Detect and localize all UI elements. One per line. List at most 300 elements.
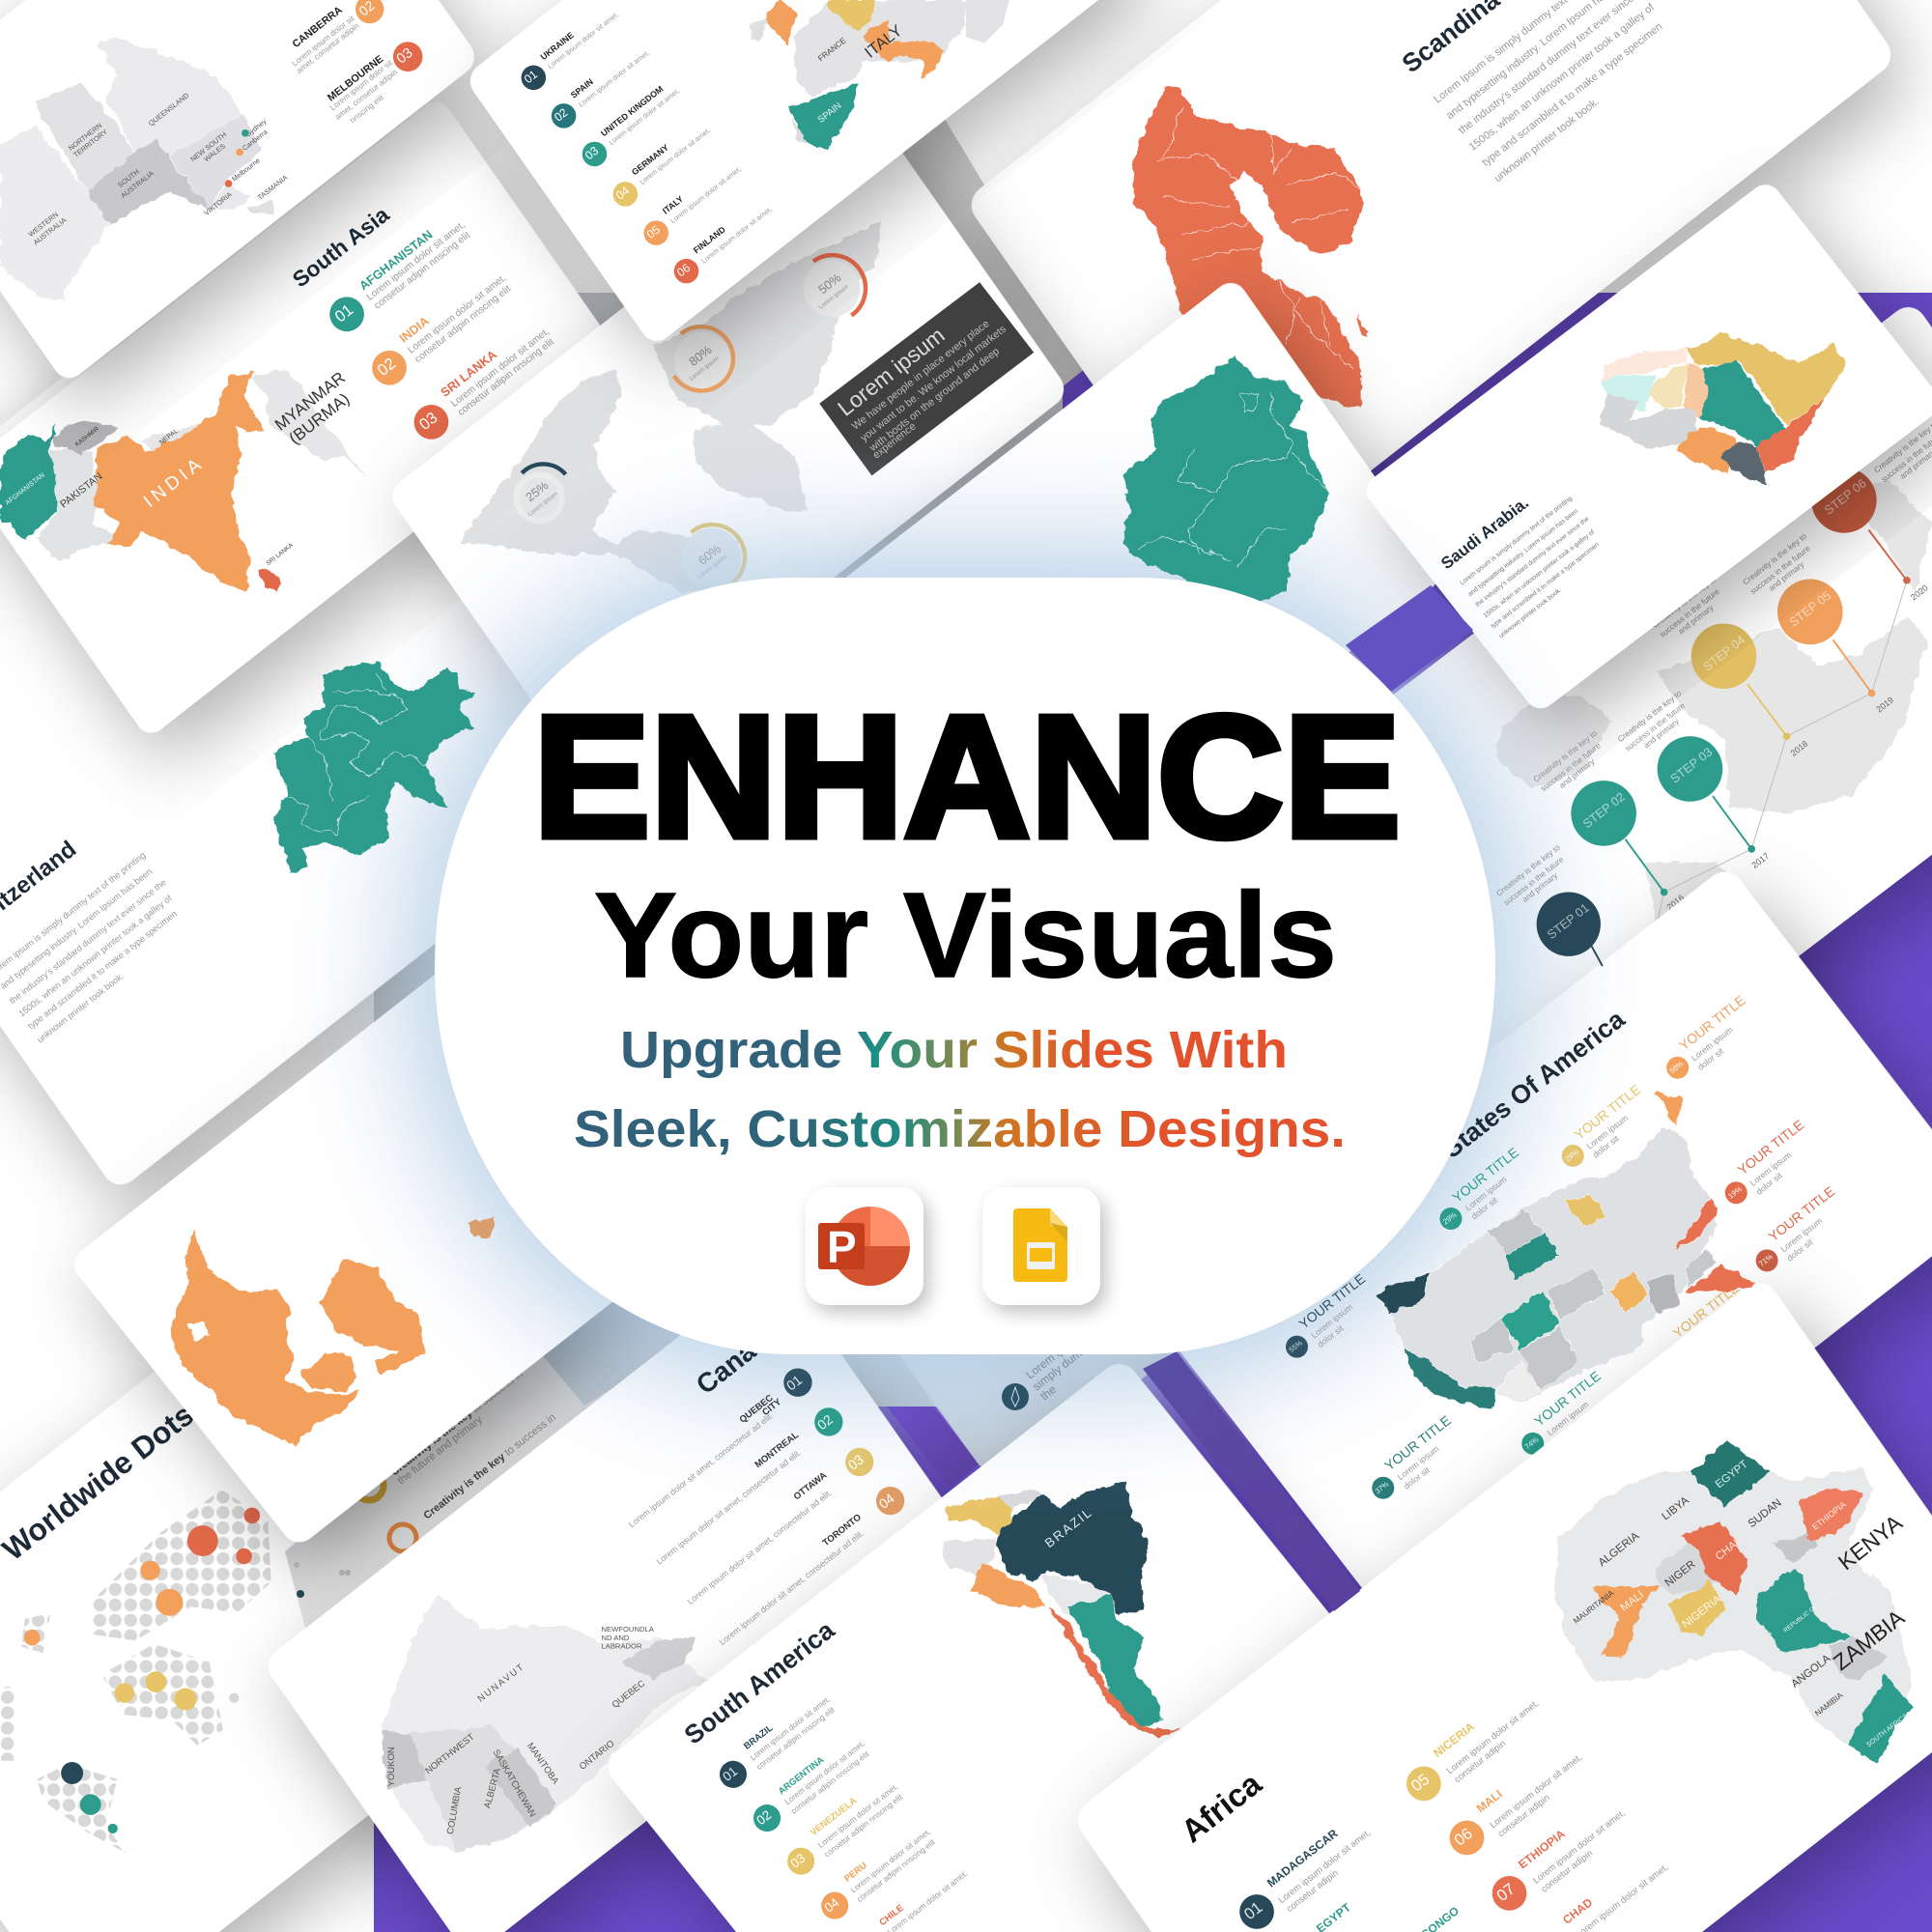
Canada heading and list: OTTAWA: [792, 1470, 829, 1502]
Saudi Arabia body text: type and scrambled it to make a type specimen: [1490, 541, 1601, 630]
Africa list: ETHIOPIA: [1516, 1827, 1568, 1871]
Europe list: [522, 10, 774, 283]
Scandinavia body text: unknown printer took book.: [1492, 96, 1602, 185]
steps years and notes: success in the future: [1623, 700, 1687, 753]
Saudi Arabia body text: the industry's standard dummy text ever since the: [1474, 516, 1591, 609]
Africa map: MALI: [1619, 1589, 1646, 1614]
Australia map: NORTHERN: [67, 121, 103, 153]
dark callout box: Lorem ipsum: [833, 323, 950, 421]
Canada heading and list: 01: [783, 1372, 805, 1393]
Canada map: LABRADOR: [601, 1642, 642, 1651]
Scandinavia body text: type and scrambled it to make a type specimen: [1480, 21, 1664, 169]
Africa list: CHAD: [1560, 1895, 1595, 1927]
Canada map: COLUMBIA: [445, 1785, 465, 1835]
USA callouts: dolor sit: [1754, 1170, 1784, 1197]
USA callouts: Lorem ipsum: [1585, 1113, 1630, 1151]
steps pins: STEP 03: [1667, 745, 1715, 786]
steps years and notes: 2019: [1874, 695, 1895, 715]
Africa list: 05: [1407, 1770, 1433, 1795]
Switzerland text: type and scrambled it to make a type specimen: [26, 909, 179, 1031]
Africa map: [1554, 1440, 1912, 1764]
South America list: 02: [753, 1807, 774, 1828]
Canada heading and list: CITY: [760, 1397, 784, 1418]
Europe list: 03: [582, 144, 601, 162]
steps years and notes: success in the future: [1658, 586, 1721, 639]
Africa map: ANGOLA: [1789, 1653, 1833, 1690]
USA callouts: [1372, 992, 1837, 1499]
Canada map: NEWFOUNDLA: [601, 1625, 655, 1634]
Canada heading and list: Lorem ipsum dolor sit amet, consectetur ad elit.: [685, 1488, 834, 1606]
steps years and notes: success in the future: [1748, 543, 1812, 596]
dark callout box: experience: [870, 420, 919, 462]
steps years and notes: [1615, 418, 1932, 912]
Africa map: ETHIOPIA: [1810, 1499, 1848, 1532]
Australia list: MELBOURNE: [326, 53, 385, 104]
Australia map: Canberra: [241, 127, 270, 153]
Europe list: 02: [552, 105, 571, 125]
Australia map: [0, 37, 290, 302]
Canada heading and list: QUEBEC: [738, 1393, 776, 1426]
USA callouts: dolor sit: [1785, 1236, 1815, 1264]
Australia list: amet, consetur adipin: [333, 67, 399, 122]
rocket list item: [1002, 1330, 1096, 1410]
panel: Denmark slide: [68, 875, 791, 1549]
Australia map: WALES: [202, 142, 227, 163]
South Asia list: Lorem ipsum dolor sit amet,: [406, 272, 508, 355]
South America list: Lorem ipsum dolor sit amet,: [748, 1694, 832, 1762]
USA callouts: Lorem ipsum: [1690, 1025, 1735, 1063]
panel: USA slide: [1151, 865, 1932, 1659]
Africa list: NICERIA: [1431, 1719, 1477, 1760]
South America map: BRAZIL: [1042, 1504, 1095, 1550]
percentage ring 80: Lorem ipsum: [689, 355, 721, 383]
map: teal country: [1123, 356, 1329, 601]
USA callouts: Lorem ipsum: [1546, 1400, 1590, 1437]
USA callouts: 37%: [1374, 1480, 1390, 1495]
Australia map: AUSTRALIA: [32, 215, 68, 246]
USA heading and callouts nearest the badge: dolor sit: [1469, 1195, 1499, 1221]
USA heading and callouts nearest the badge: Lorem ipsum: [1463, 1175, 1509, 1212]
South America list: BRAZIL: [742, 1722, 776, 1752]
South America list: VENEZUELA: [809, 1796, 859, 1838]
USA callouts: YOUR TITLE: [1381, 1412, 1454, 1473]
South Asia map: AFGHANISTAN: [5, 472, 46, 507]
South Asia map: MYANMAR: [270, 367, 349, 435]
steps 01 and 02 nearest the badge: [1494, 728, 1667, 966]
Africa map: LIBYA: [1660, 1494, 1691, 1522]
Canada heading and list: Lorem ipsum dolor sit amet, consectetur ad elit.: [655, 1447, 803, 1567]
USA callouts: dolor sit: [1402, 1464, 1432, 1492]
percentage ring 25: Lorem ipsum: [526, 491, 559, 518]
Scandinavia map: [1132, 86, 1368, 408]
steps map: [1496, 480, 1932, 936]
Australia map: QUEENSLAND: [147, 91, 190, 128]
steps pins: STEP 06: [1822, 475, 1869, 518]
map: USA: [1376, 1093, 1758, 1409]
Europe map: SPAIN: [816, 100, 843, 126]
South Asia list: 02: [374, 355, 399, 380]
steps 01 and 02 nearest the badge: Creativity is the key to: [1494, 842, 1562, 898]
steps pins: STEP 04: [1700, 632, 1747, 674]
South America map: [941, 1481, 1179, 1739]
South America list: consetur adipin nnscing elit: [855, 1836, 937, 1904]
Australia list: 03: [394, 45, 416, 67]
Canada heading and list: Lorem ipsum dolor sit amet, consectetur ad elit.: [627, 1410, 775, 1529]
panel: Saudi Arabia slide: [1360, 179, 1932, 715]
South America heading: South America: [679, 1615, 840, 1750]
Europe list: 06: [674, 261, 693, 279]
South Asia list: Lorem ipsum dolor sit amet,: [449, 327, 552, 410]
Canada map: ALBERTA: [482, 1767, 503, 1809]
percentage ring 60: Lorem ipsum: [696, 554, 728, 581]
Europe list: SPAIN: [569, 76, 595, 100]
Europe list: UKRAINE: [539, 30, 576, 62]
Africa list: consetur adipin: [1285, 1867, 1341, 1915]
Canada map: ONTARIO: [578, 1739, 616, 1773]
Africa heading: Africa: [1175, 1766, 1268, 1850]
Canada map: [381, 1595, 708, 1853]
panel: South Asia slide: [0, 96, 628, 739]
Canada heading and list: TORONTO: [821, 1512, 864, 1548]
Canada map: SASKATCHEWAN: [491, 1747, 538, 1819]
Scandinavia body text: [1432, 0, 1664, 185]
Australia list: nnscing elit: [348, 92, 385, 125]
steps 01 and 02 nearest the badge: STEP 02: [1580, 789, 1628, 831]
USA callouts: YOUR TITLE: [1572, 1082, 1643, 1143]
South Asia map: KASHMIR: [74, 425, 100, 448]
Switzerland text: and typesetting industry. Lorem Ipsum has been: [0, 867, 154, 991]
South America list: 01: [720, 1764, 740, 1784]
steps 01 and 02 nearest the badge: Creativity is the key to: [1531, 728, 1599, 784]
Europe map: ITALY: [861, 21, 905, 62]
Europe list: UNITED KINGDOM: [599, 84, 665, 138]
Africa map: ZAMBIA: [1829, 1605, 1910, 1675]
USA heading and callouts nearest the badge: 29%: [1441, 1210, 1459, 1226]
heading: Your Visuals: Your Visuals: [594, 868, 1337, 1003]
Saudi Arabia body text: 1500s, when an unknown printer took a galley of: [1483, 528, 1596, 619]
Australia map: SOUTH: [116, 167, 141, 189]
South Asia heading: South Asia: [288, 202, 394, 292]
Canada heading and list: 03: [845, 1451, 867, 1473]
panel: Europe slide: [464, 0, 1141, 348]
Africa map: CHAD: [1714, 1534, 1746, 1563]
Saudi Arabia body text: Lorem ipsum is simply dummy text of the printing: [1459, 496, 1574, 586]
Europe list: ITALY: [661, 194, 685, 216]
USA heading and callouts nearest the badge: 55%: [1287, 1338, 1304, 1354]
USA heading and callouts nearest the badge: YOUR TITLE: [1296, 1270, 1368, 1332]
band: timeline slide peeking out: [285, 1246, 734, 1642]
USA callouts: 29%: [1563, 1148, 1580, 1163]
Europe list: GERMANY: [630, 142, 670, 177]
USA callouts: 58%: [1668, 1060, 1685, 1075]
panel: steps timeline slide: [1250, 299, 1932, 1176]
grey layer under central slides: [374, 293, 1063, 1406]
percentage ring 50: Lorem ipsum: [817, 284, 850, 311]
South Asia list: consetur adipin nnscing elit: [372, 230, 472, 312]
Africa map: REPUBLIC OF CONGO: [1782, 1588, 1838, 1634]
Switzerland text: 1500s, when an unknown printer took a galley of: [16, 893, 174, 1019]
USA callouts: YOUR TITLE: [1676, 992, 1748, 1053]
Africa map: EGYPT: [1714, 1459, 1750, 1491]
USA heading and callouts nearest the badge: [1286, 1004, 1631, 1358]
Europe list: Lorem ipsum dolor sit amet,: [668, 164, 743, 225]
Saudi Arabia map: [1601, 332, 1846, 487]
steps years and notes: 2017: [1749, 851, 1771, 870]
percentage ring 25: [513, 464, 566, 524]
South Asia list: [329, 220, 556, 440]
Switzerland text: [0, 837, 179, 1044]
Africa map: ALGERIA: [1597, 1530, 1642, 1569]
USA callouts: dolor sit: [1695, 1046, 1725, 1072]
Canada heading and list: [627, 1316, 904, 1647]
USA callouts: Lorem ipsum: [1778, 1216, 1824, 1254]
USA callouts: dolor sit: [1591, 1133, 1621, 1160]
Australia map: WESTERN: [27, 210, 60, 239]
Africa list: 06: [1451, 1824, 1476, 1850]
Africa list: Lorem ipsum dolor sit amet,: [1531, 1807, 1628, 1887]
USA callouts: Lorem ipsum: [1396, 1444, 1440, 1482]
map: Switzerland: [272, 663, 474, 875]
Canada map: YOUKON: [386, 1747, 397, 1787]
panel: teal country slide: [701, 276, 1445, 991]
panel: rocket slide: [894, 1256, 1177, 1488]
Europe list: Lorem ipsum dolor sit amet,: [577, 48, 651, 109]
Africa list: consetur adipin: [1496, 1793, 1551, 1839]
South America list: PERU: [842, 1861, 869, 1885]
Europe map: FRANCE: [816, 35, 848, 63]
Africa list: consetur adipin: [1539, 1848, 1595, 1895]
USA callouts: 19%: [1726, 1184, 1744, 1201]
USA callouts: YOUR TITLE: [1531, 1368, 1604, 1429]
Saudi Arabia body text: [1459, 496, 1601, 639]
Canada map: QUEBEC: [611, 1678, 647, 1711]
rocket list item: simply dummy: [1030, 1337, 1096, 1393]
South Asia map: INDIA: [140, 452, 209, 512]
Scandinavia body text: 1500s, when an unknown printer took a galley of: [1467, 1, 1657, 154]
Africa list: 07: [1493, 1880, 1519, 1905]
subtitle line 1: Upgrade Your Slides With: [620, 1021, 1288, 1079]
Switzerland text: the industry's standard dummy text ever since the: [8, 877, 168, 1006]
Canada heading and list: Canada: [691, 1316, 786, 1400]
South Asia list: 03: [415, 409, 440, 434]
Africa map: NIGERIA: [1680, 1593, 1723, 1631]
grey strip between world and scandinavia slides: [869, 58, 1092, 388]
Africa map: SUDAN: [1747, 1497, 1784, 1530]
dark callout box: with boots on the ground and deep: [867, 346, 1002, 454]
Australia map: AUSTRALIA: [119, 169, 156, 200]
band: grey strip beside Canada slide: [821, 1333, 934, 1406]
percentage ring 50: 50%: [815, 270, 843, 297]
South Asia map: PAKISTAN: [58, 470, 104, 511]
rocket list item: Lorem ipsum: [1023, 1330, 1085, 1381]
percentage ring 25: 25%: [523, 478, 551, 504]
Australia list: Lorem ipsum dolor sit: [290, 13, 356, 68]
South Asia map: NEPAL: [158, 428, 180, 446]
Africa map: NIGER: [1663, 1558, 1698, 1589]
Europe list: 04: [613, 184, 632, 203]
South Asia list: SRI LANKA: [438, 347, 499, 400]
Europe list: FINLAND: [692, 224, 727, 255]
Europe list: 01: [522, 68, 540, 86]
South America list: Lorem ipsum dolor sit amet,: [848, 1827, 932, 1894]
USA callouts: YOUR TITLE: [1670, 1280, 1742, 1341]
timeline snippets: Creativity is the key to success in: [421, 1411, 558, 1521]
steps path: [1655, 581, 1907, 933]
band: second layer: [536, 1246, 734, 1406]
USA callouts: Lorem ipsum: [1748, 1150, 1793, 1188]
Africa list: 01: [1240, 1898, 1265, 1923]
South America list: Lorem ipsum dolor sit amet,: [782, 1738, 867, 1806]
Switzerland text: unknown printer took book.: [36, 971, 126, 1044]
steps years and notes: Creativity is the key to: [1650, 574, 1718, 630]
icon: PowerPoint: P: [827, 1222, 857, 1272]
dark callout box: We have people in place every place: [850, 318, 991, 433]
Europe list: Lorem ipsum dolor sit amet,: [638, 126, 712, 186]
South America list: consetur adipin nnscing elit: [789, 1748, 871, 1816]
panel: Scandinavia slide: [964, 0, 1898, 581]
timeline snippets: Creativity is the key to success in: [388, 1368, 526, 1478]
Canada heading and list: MONTREAL: [753, 1430, 801, 1470]
rocket list item: the: [1037, 1382, 1059, 1403]
steps pins: STEP 05: [1786, 588, 1833, 630]
icon: Google Slides: [982, 1187, 1100, 1305]
panel: Africa slide: [1070, 1274, 1932, 1932]
heading: ENHANCE: ENHANCE: [533, 680, 1401, 874]
blue glow around central badge: [406, 546, 1526, 1386]
South Asia list: Lorem ipsum dolor sit amet,: [365, 220, 468, 303]
South America list: ARGENTINA: [777, 1755, 826, 1797]
steps 01 and 02 nearest the badge: and primary: [1557, 756, 1597, 790]
South Asia map: [0, 367, 366, 593]
Africa map: NAMIBIA: [1813, 1690, 1845, 1718]
subtitle line 2: Sleek, Customizable Designs.: [574, 1100, 1346, 1158]
timeline snippets: [294, 1368, 558, 1598]
Australia list: Lorem ipsum dolor sit: [327, 57, 395, 112]
Africa map: MAURITANIA: [1571, 1588, 1616, 1626]
steps years and notes: Creativity is the key to: [1741, 530, 1808, 586]
steps years and notes: 2016: [1664, 893, 1686, 912]
panel: Australia slide: [0, 0, 481, 384]
steps 01 and 02 nearest the badge: and primary: [1520, 870, 1560, 904]
map: Denmark: [169, 1218, 496, 1446]
steps years and notes: 2018: [1789, 739, 1809, 758]
purple backdrop panel: [374, 293, 1932, 1932]
Saudi Arabia body text: and typesetting industry. Lorem Ipsum has been: [1467, 508, 1579, 598]
South Asia map: SRI LANKA: [265, 542, 295, 567]
South Asia list: consetur adipin nnscing elit: [413, 284, 513, 365]
USA callouts: 71%: [1757, 1252, 1775, 1268]
panel: world map slide: [386, 112, 1070, 774]
Africa list: Lorem ipsum dolor sit amet,: [1488, 1752, 1584, 1831]
world map shapes: [459, 222, 881, 591]
South America list: 04: [821, 1894, 842, 1916]
Saudi Arabia heading: Saudi Arabia.: [1437, 493, 1532, 573]
Canada heading and list: Lorem ipsum dolor sit amet, consectetur ad elit.: [718, 1528, 866, 1647]
percentage ring 50: [804, 255, 866, 317]
percentage ring 80: 80%: [686, 342, 714, 369]
Australia map: TASMANIA: [256, 173, 290, 202]
timeline snippets: the future and primary: [395, 1413, 485, 1487]
Canada map: MANITOBA: [525, 1741, 561, 1787]
Africa list: [1239, 1698, 1670, 1932]
Canada map: ND AND: [601, 1634, 630, 1642]
South America list: 03: [787, 1851, 808, 1871]
USA heading and callouts nearest the badge: dolor sit: [1316, 1323, 1346, 1350]
Europe list: Lorem ipsum dolor sit amet,: [546, 10, 620, 71]
South America list: Lorem ipsum dolor sit amet,: [816, 1781, 899, 1850]
South America list: CHILE: [877, 1903, 906, 1928]
Africa list: Lorem ipsum dolor sit amet,: [1445, 1698, 1541, 1776]
steps 01 and 02 nearest the badge: success in the future: [1539, 740, 1603, 793]
Africa list: MALI: [1474, 1787, 1505, 1815]
Australia list: CANBERRA: [291, 4, 345, 50]
Canada heading and list: 04: [876, 1491, 897, 1512]
Africa map: KENYA: [1833, 1509, 1907, 1575]
Australia map: Melbourne: [230, 156, 262, 184]
panel: Worldwide Dots slide: [0, 1048, 844, 1932]
steps years and notes: and primary: [1767, 559, 1806, 593]
Europe list: 05: [644, 222, 663, 242]
percentage ring 60: 60%: [696, 541, 724, 568]
USA heading and callouts nearest the badge: YOUR TITLE: [1449, 1145, 1521, 1206]
panel: South America slide: [601, 1356, 1425, 1932]
dark callout box: you want to be. We know local markets: [859, 323, 1009, 444]
Saudi Arabia body text: unknown printer took book.: [1498, 586, 1563, 639]
USA callouts: 74%: [1523, 1435, 1540, 1451]
dot world map: [0, 1490, 271, 1853]
Africa list: MADAGASCAR: [1264, 1827, 1341, 1890]
South Asia map: (BURMA): [285, 389, 353, 448]
South Asia list: 01: [331, 300, 356, 326]
South America list: [720, 1694, 969, 1932]
Canada map: NORTHWEST: [423, 1732, 477, 1776]
percentage ring 60: [682, 525, 745, 587]
Dots title: Worldwide Dots: [0, 1397, 200, 1567]
USA heading and callouts nearest the badge: Lorem ipsum: [1309, 1302, 1354, 1340]
Africa map: SOUTH AFRICA: [1865, 1713, 1910, 1748]
panel: Switzerland slide: [0, 162, 725, 1192]
USA callouts: YOUR TITLE: [1735, 1117, 1806, 1178]
Australia map: Sydney: [244, 117, 269, 138]
South America list: consetur adipin nnscing elit: [754, 1704, 837, 1772]
steps pins: [1658, 468, 1911, 853]
Australia map: VIKTORIA: [202, 190, 234, 217]
USA callouts: YOUR TITLE: [1766, 1183, 1837, 1244]
steps years and notes: 2020: [1909, 582, 1930, 602]
purple gaps kept saturated near the badge: [887, 585, 1473, 1611]
Europe map: [749, 0, 966, 151]
South America list: consetur adipin nnscing elit: [822, 1792, 904, 1859]
Canada heading and list: 02: [814, 1411, 836, 1433]
steps years and notes: and primary: [1641, 716, 1681, 751]
Australia map: TERRITORY: [71, 128, 109, 159]
Africa list: consetur adipin: [1452, 1739, 1508, 1785]
Europe list: Lorem ipsum dolor sit amet,: [699, 205, 774, 266]
dark callout box: [819, 282, 1034, 475]
percentage ring 80: [674, 327, 733, 391]
icon: PowerPoint: [806, 1187, 923, 1305]
Australia list: amet, consetur adipin: [295, 20, 361, 75]
steps years and notes: Creativity is the key to: [1615, 688, 1684, 744]
Africa list: Lorem ipsum dolor sit amet,: [1277, 1828, 1373, 1906]
Canada map: NUNAVUT: [476, 1662, 527, 1705]
steps years and notes: and primary: [1676, 602, 1716, 637]
USA heading and callouts nearest the badge: United States Of America: [1369, 1004, 1631, 1218]
South Asia list: AFGHANISTAN: [356, 227, 436, 293]
Europe map continuation: [966, 0, 1009, 43]
Europe list: Lorem ipsum dolor sit amet,: [607, 86, 681, 147]
steps 01 and 02 nearest the badge: STEP 01: [1545, 900, 1592, 942]
